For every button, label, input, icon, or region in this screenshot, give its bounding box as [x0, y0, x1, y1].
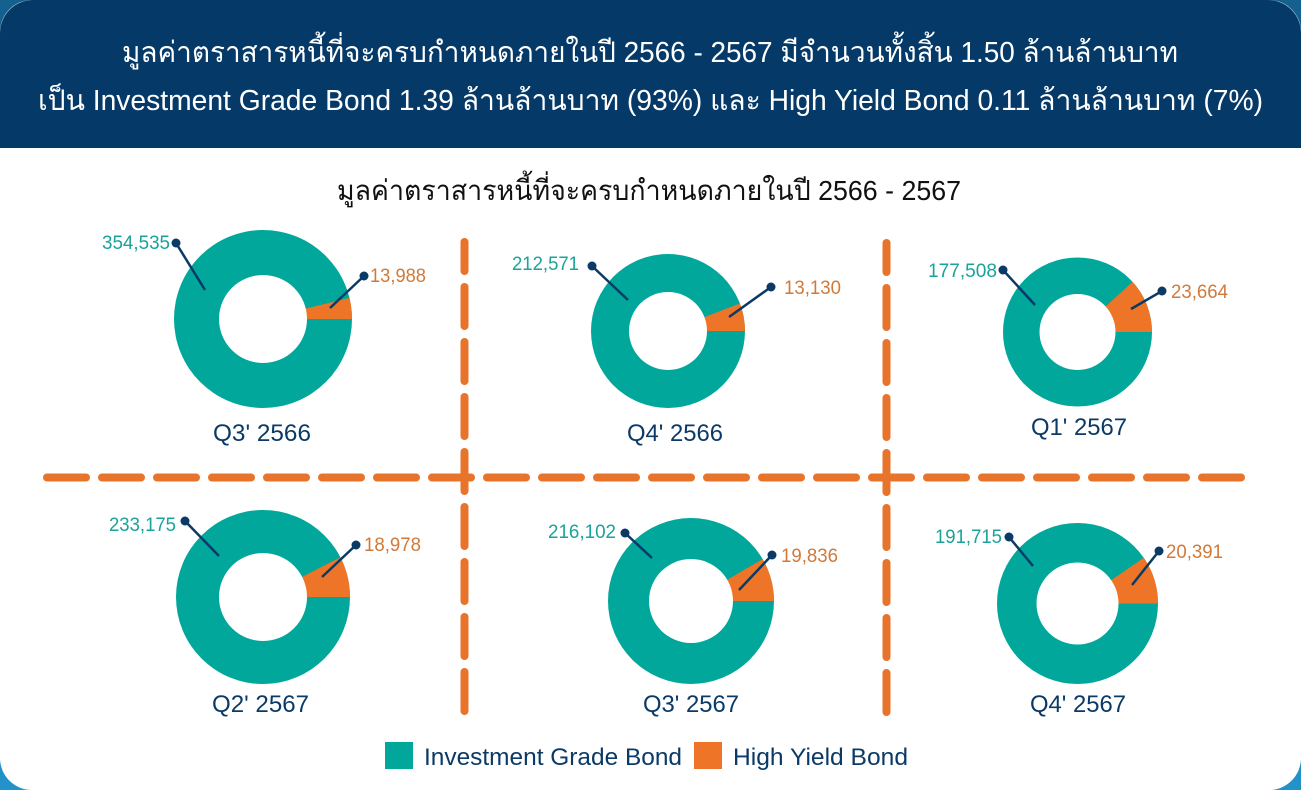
legend [385, 742, 908, 771]
donut: Q4' 2567: 20,391 [1166, 542, 1223, 563]
donut: Q1' 2567: 23,664 [1171, 282, 1228, 303]
grid of dashed dividers [47, 242, 1244, 713]
donut: Q4' 2566 [512, 254, 841, 447]
donut: Q3' 2567: 19,836 [781, 546, 838, 567]
donut: Q4' 2567: 191,715 [935, 527, 1002, 548]
donut: Q2' 2567 [109, 510, 421, 718]
donut: Q4' 2566: Q4' 2566 [627, 420, 723, 447]
chart title: มูลค่าตราสารหนี้ที่จะครบกำหนดภายในปี 2566 - 2567 [337, 170, 961, 208]
donut: Q1' 2567: 177,508 [928, 261, 997, 282]
header banner [0, 0, 1301, 148]
donut: Q4' 2567 [935, 523, 1223, 718]
donut: Q3' 2567: 216,102 [548, 522, 616, 543]
donut: Q3' 2567: Q3' 2567 [643, 691, 739, 718]
donut: Q2' 2567: 233,175 [109, 515, 176, 536]
header line 2: เป็น Investment Grade Bond 1.39 ล้านล้านบาท (93%) และ High Yield Bond 0.11 ล้านล้านบาท (7%) [38, 82, 1263, 117]
donut: Q3' 2566: 13,988 [370, 266, 426, 287]
donut: Q4' 2567: Q4' 2567 [1030, 691, 1126, 718]
legend: High Yield Bond [733, 744, 908, 771]
header line 1: มูลค่าตราสารหนี้ที่จะครบกำหนดภายในปี 2566 - 2567 มีจำนวนทั้งสิ้น 1.50 ล้านล้านบาท [122, 31, 1178, 70]
donut: Q1' 2567: Q1' 2567 [1031, 414, 1127, 441]
donut: Q2' 2567: 18,978 [364, 535, 421, 556]
donut: Q3' 2566: Q3' 2566 [213, 420, 311, 447]
donut: Q3' 2566 [102, 230, 426, 447]
legend: Investment Grade Bond [424, 744, 682, 771]
donut: Q1' 2567 [928, 258, 1228, 441]
donut: Q3' 2566: 354,535 [102, 233, 170, 254]
donut: Q4' 2566: 212,571 [512, 254, 579, 275]
donut: Q2' 2567: Q2' 2567 [212, 691, 309, 718]
donut: Q4' 2566: 13,130 [784, 278, 841, 299]
donut: Q3' 2567 [548, 518, 838, 718]
